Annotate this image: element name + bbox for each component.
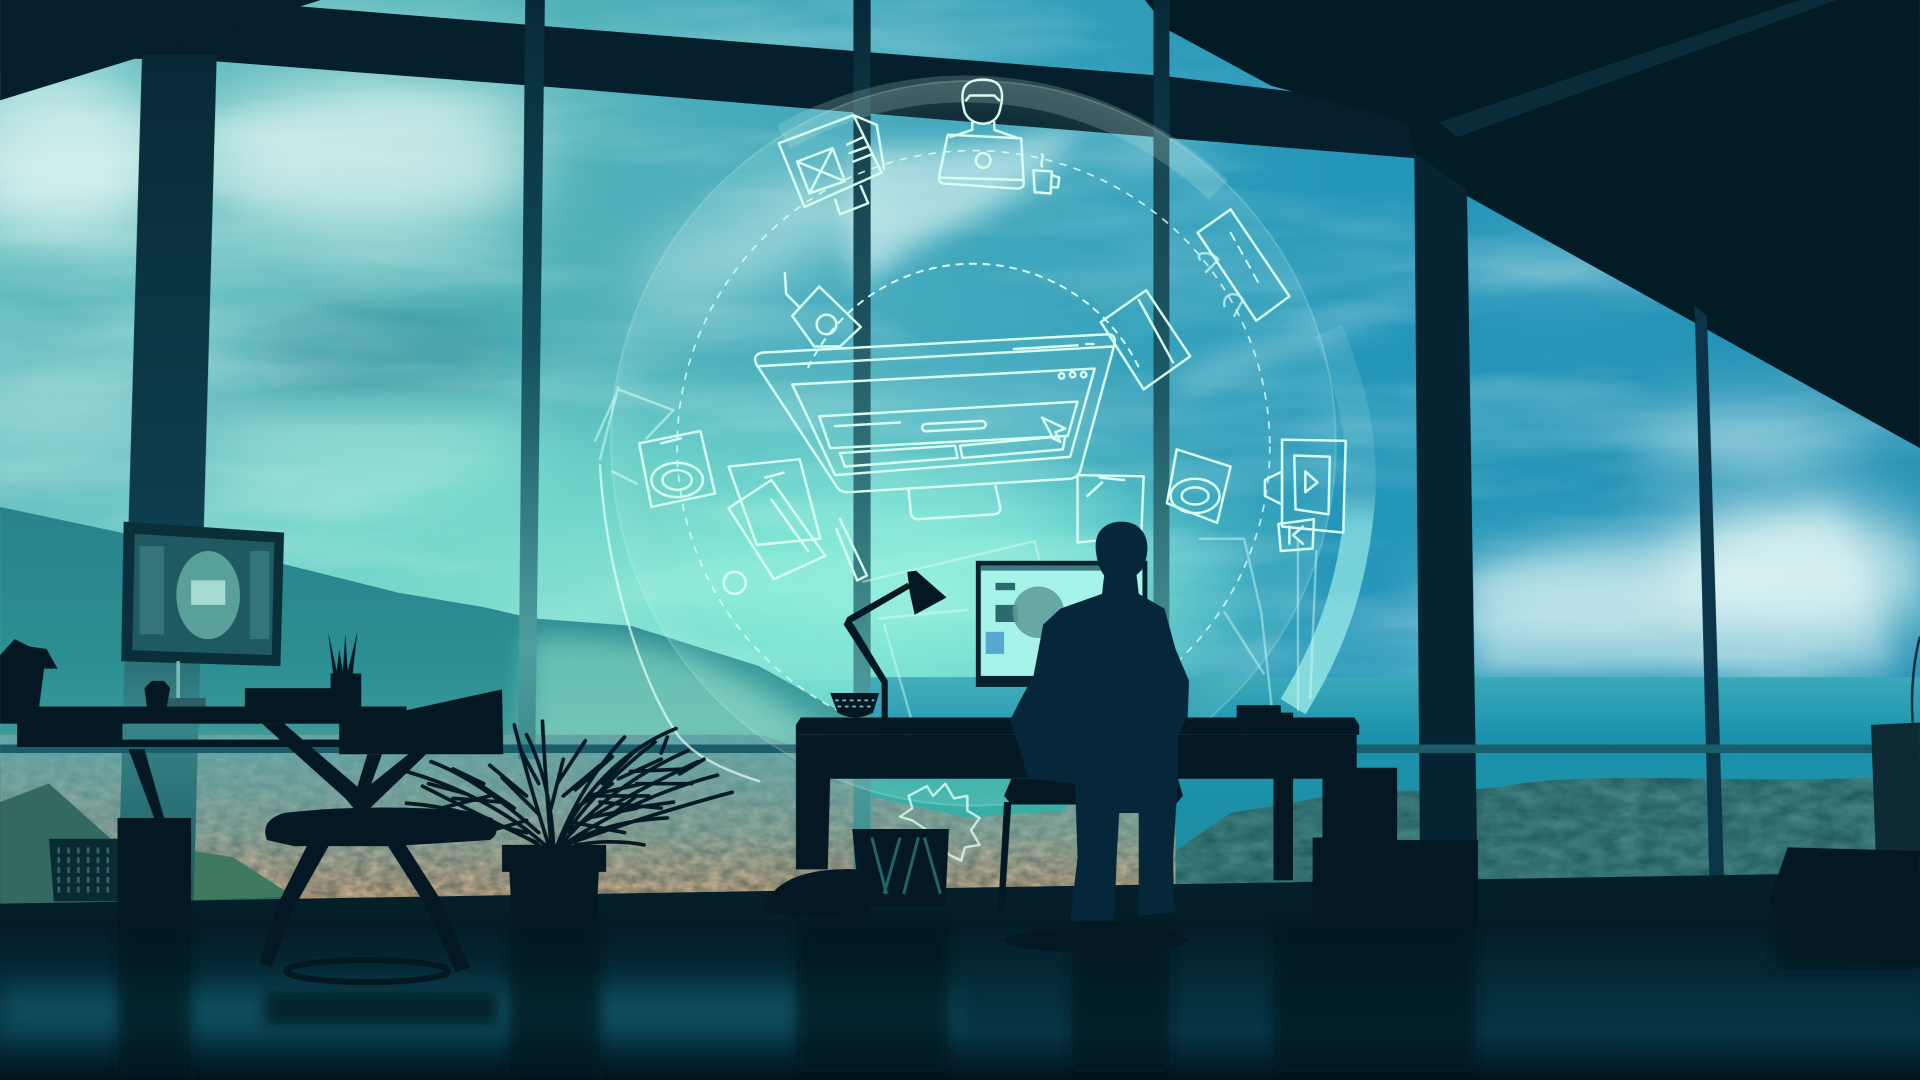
dashed orbit inner	[808, 264, 1139, 367]
mullion 3	[1153, 0, 1169, 882]
books on desk	[245, 688, 333, 710]
left desk lower bar	[17, 740, 407, 747]
sky	[0, 0, 1920, 759]
icon: lower device outlines	[863, 539, 1316, 735]
hologram sphere	[595, 80, 1361, 861]
icon: designer with laptop	[939, 80, 1024, 189]
left desk setup	[0, 522, 503, 982]
vase stem	[1912, 637, 1920, 722]
main right pillar	[1414, 153, 1478, 906]
icon: coffee cup	[1033, 154, 1059, 193]
top ceiling and beams	[0, 0, 1920, 448]
cloud streak texture	[0, 0, 1920, 680]
patterned bowl	[830, 693, 879, 718]
desk top	[796, 718, 1359, 735]
central monitor	[755, 334, 1115, 519]
top left corner	[0, 0, 321, 100]
chair leg	[998, 802, 1011, 912]
side cabinet	[1313, 768, 1478, 924]
mullion 2	[853, 0, 871, 882]
sphere upper rim	[784, 89, 1218, 190]
waste basket right	[852, 829, 949, 906]
icon: gear	[900, 784, 980, 861]
icon: tablet device	[1101, 290, 1190, 389]
stool base ring	[287, 960, 448, 982]
icon: camera	[785, 273, 861, 347]
main upper beam	[122, 0, 1427, 159]
potted plant	[0, 639, 58, 707]
green horizon glow	[0, 355, 1347, 820]
monitor on left desk	[121, 522, 284, 707]
floor reflections	[118, 921, 1920, 1080]
small desk plant	[144, 681, 170, 708]
city in the valley	[0, 735, 1176, 912]
second leg brace	[353, 754, 382, 808]
mullion 1	[518, 0, 545, 759]
torso and legs	[1010, 573, 1189, 921]
lower sill	[0, 872, 1920, 924]
left pillar	[118, 55, 217, 906]
distant hills right	[1176, 778, 1876, 884]
cabinet base	[118, 818, 191, 928]
floor palm plant	[407, 721, 732, 921]
monitor on right desk	[976, 561, 1147, 687]
waste basket left	[49, 839, 118, 901]
desk lamp	[844, 571, 947, 718]
icon: left speaker	[595, 387, 715, 507]
icon: wireframe monitor	[779, 115, 884, 214]
central bright glow	[600, 441, 1261, 759]
icon: video player	[1265, 440, 1346, 551]
green foreground slopes	[0, 784, 282, 904]
floor	[0, 921, 1920, 1080]
left rear legs	[129, 749, 164, 818]
icon: phones and tablets stack	[724, 459, 867, 594]
right floor objects	[1769, 637, 1920, 967]
bench stool seat	[265, 807, 497, 846]
ceiling rafter	[1439, 0, 1837, 137]
teal water glimpse	[870, 778, 1068, 818]
left desk legs	[262, 724, 426, 813]
head	[1096, 522, 1147, 578]
sphere lower left rim	[600, 465, 759, 781]
items on desk	[1237, 705, 1293, 719]
stool legs	[260, 842, 470, 972]
sea and horizon	[857, 677, 1920, 910]
drawer case	[339, 689, 503, 754]
desk end supports	[17, 722, 122, 747]
pile of objects	[1769, 847, 1920, 967]
right desk setup	[762, 522, 1478, 953]
chair base shadow	[1004, 928, 1188, 953]
icon: tablet in hands	[1198, 209, 1289, 321]
sphere body	[611, 81, 1336, 806]
top right ceiling mass	[1145, 0, 1920, 448]
icon: phone right	[1078, 475, 1144, 542]
desk apron and legs	[796, 735, 1357, 882]
left desk top	[0, 707, 407, 724]
mullion right	[1695, 306, 1724, 882]
horizontal sill	[0, 744, 1920, 753]
plant pot	[502, 845, 606, 921]
person at desk	[1010, 522, 1189, 921]
pencil cup	[328, 631, 361, 710]
floor bag	[762, 869, 872, 921]
icon: right speaker	[1167, 449, 1231, 523]
palm fronds	[407, 721, 732, 845]
distant hills left	[0, 507, 882, 784]
floor teal glow band	[0, 986, 955, 1032]
clouds	[0, 0, 1920, 820]
dashed orbit outer	[677, 151, 1270, 743]
sphere bright rim	[1293, 331, 1361, 707]
tall vase	[1871, 722, 1920, 857]
chair seat	[1004, 779, 1183, 804]
